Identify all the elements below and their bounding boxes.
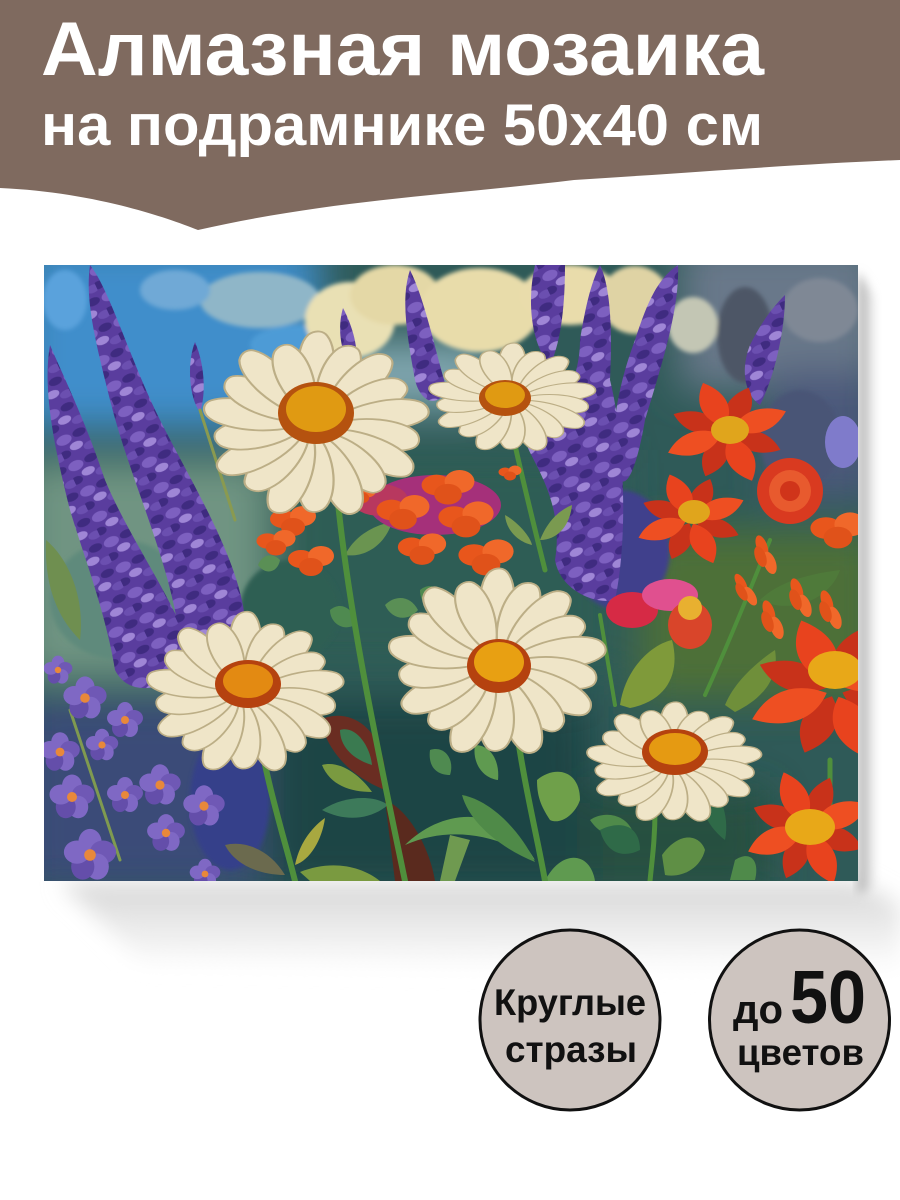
badge: round rhinestones bbox=[480, 930, 660, 1110]
lupine spikes bbox=[48, 265, 785, 688]
badge: up to 50 colours bbox=[710, 930, 890, 1110]
badge: up to 50 colours: 50 bbox=[790, 955, 866, 1039]
orange and magenta cluster bbox=[256, 466, 522, 576]
red flower: right bbox=[752, 620, 858, 754]
lavender blue flower bbox=[825, 416, 861, 468]
canvas shadow bbox=[60, 272, 900, 972]
pink flowers right bbox=[606, 579, 712, 649]
red rosette bbox=[757, 458, 823, 524]
painting: wildflower meadow bbox=[44, 265, 858, 881]
daisy: lower right bbox=[584, 702, 764, 824]
subtitle: на подрамнике 50х40 см bbox=[41, 93, 763, 158]
daisy: upper centre bbox=[427, 343, 597, 453]
painted background bbox=[44, 265, 858, 881]
red flower: bottom right bbox=[748, 772, 858, 881]
daisy: upper left bbox=[201, 331, 431, 518]
foliage bbox=[46, 505, 840, 881]
daisy: lower centre bbox=[386, 568, 608, 757]
title: Алмазная мозаика bbox=[41, 7, 765, 92]
badge: up to 50 colours: цветов bbox=[737, 1032, 864, 1073]
badge: round rhinestones: Круглые bbox=[494, 982, 646, 1023]
small violet flowers bbox=[40, 656, 225, 888]
header banner bbox=[0, 0, 900, 230]
stems bbox=[70, 410, 830, 881]
badge: up to 50 colours: до bbox=[733, 988, 783, 1032]
badge: round rhinestones: стразы bbox=[505, 1029, 637, 1070]
red flower: top bbox=[668, 382, 786, 481]
daisy: lower left bbox=[144, 612, 346, 774]
orange buds right bbox=[734, 512, 858, 639]
red flower: middle bbox=[638, 474, 744, 564]
